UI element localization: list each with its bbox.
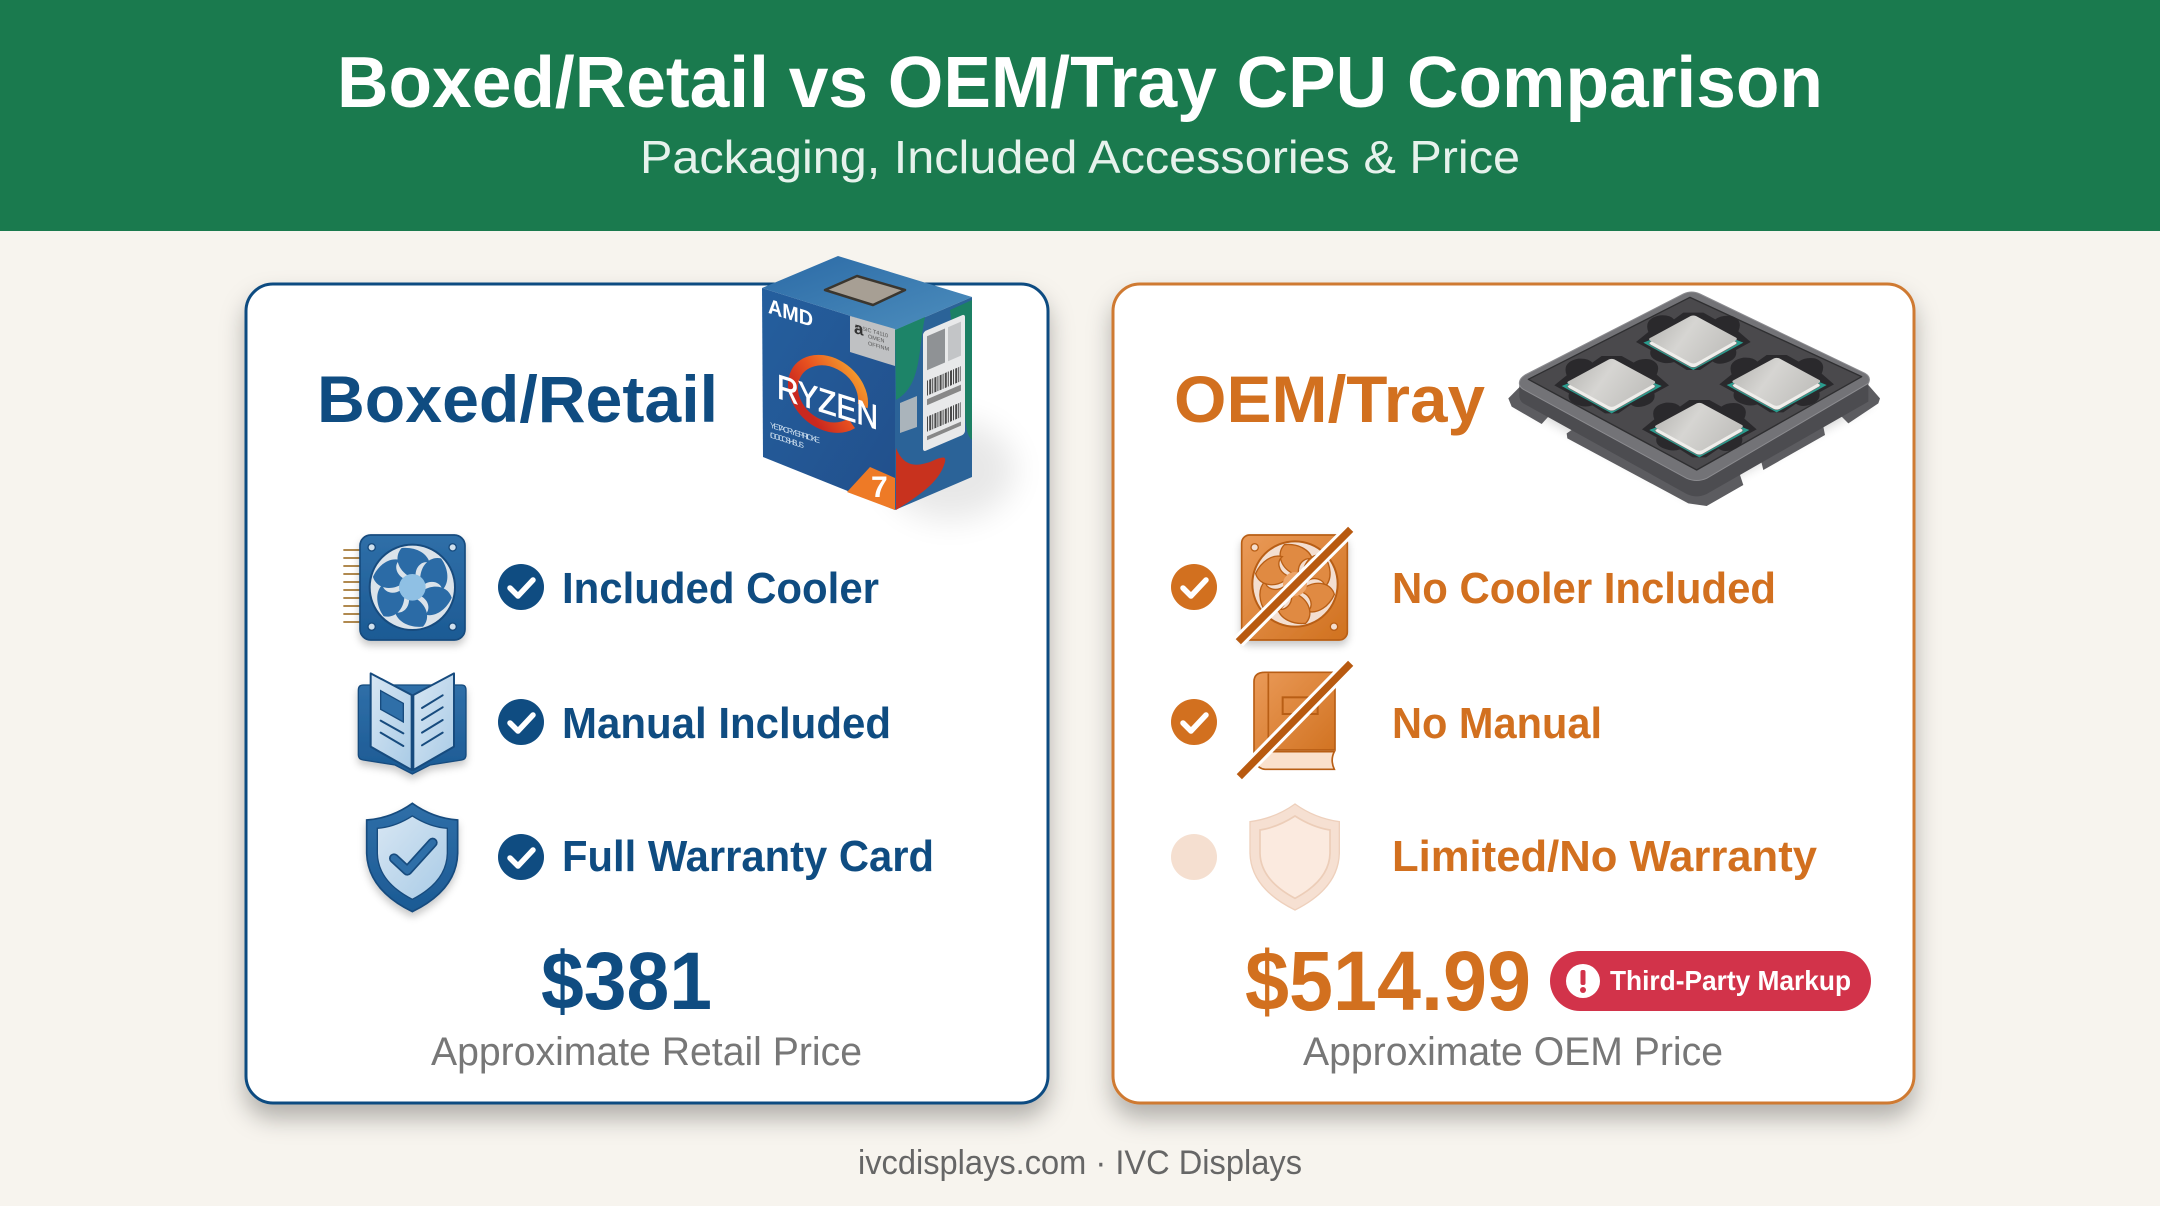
footer credit: ivcdisplays.com · IVC Displays <box>858 1144 1302 1182</box>
silver label on box: OMEN <box>868 334 885 345</box>
silver label on box: OFFINM <box>868 341 889 353</box>
panel: Boxed/Retail <box>246 256 1048 1103</box>
row: Manual Included <box>358 673 891 774</box>
muted status dot <box>1171 834 1217 880</box>
icon: faded shield <box>1250 804 1339 910</box>
header banner <box>0 0 2160 231</box>
silver label on box <box>850 316 895 366</box>
badge: Third-Party Markup <box>1550 951 1871 1011</box>
check badge <box>498 564 544 610</box>
icon: cooling fan <box>343 535 465 640</box>
label: Manual Included <box>562 699 891 748</box>
box brand text: IOOCO SHISUS <box>770 431 805 450</box>
row: Included Cooler <box>343 535 879 640</box>
row: No Cooler Included <box>1171 529 1776 642</box>
title: Boxed/Retail vs OEM/Tray CPU Comparison <box>337 43 1823 123</box>
orange 7 badge <box>847 467 895 510</box>
row: No Manual <box>1171 663 1602 777</box>
product image: retail CPU box <box>762 256 1015 520</box>
retail price caption: Approximate Retail Price <box>431 1030 862 1074</box>
box brand text: AMD <box>768 294 813 332</box>
box brand text: YETA CRY EPIFI IOKE <box>770 421 821 445</box>
label: Limited/No Warranty <box>1392 832 1818 881</box>
panel: OEM/Tray <box>1113 284 1914 1103</box>
icon: open manual <box>358 673 466 774</box>
box brand text: RYZEN <box>777 367 878 437</box>
check badge <box>1171 699 1217 745</box>
heading: OEM/Tray: OEM/Tray <box>1174 362 1485 436</box>
heading: Boxed/Retail: Boxed/Retail <box>317 362 718 436</box>
subtitle: Packaging, Included Accessories & Price <box>640 131 1520 183</box>
check badge <box>1171 564 1217 610</box>
orange 7 badge: 7 <box>871 471 888 504</box>
row: Full Warranty Card <box>367 803 934 912</box>
label: No Cooler Included <box>1392 564 1776 613</box>
silver label on box: BASIC T4110 <box>855 324 888 340</box>
badge: Third-Party Markup: Third-Party Markup <box>1610 965 1851 996</box>
check badge <box>498 699 544 745</box>
icon: crossed-out manual <box>1239 663 1351 777</box>
check badge <box>498 834 544 880</box>
icon: crossed-out fan <box>1238 529 1351 642</box>
retail price: $381 <box>541 936 712 1027</box>
silver label on box: a <box>854 317 864 340</box>
label: Full Warranty Card <box>562 832 934 881</box>
box brand text <box>768 294 878 474</box>
OEM price: $514.99 <box>1245 934 1531 1028</box>
product image: CPU tray <box>1508 292 1880 506</box>
row: Limited/No Warranty <box>1171 804 1818 910</box>
label: No Manual <box>1392 699 1602 748</box>
barcode sticker <box>923 314 965 452</box>
label: Included Cooler <box>562 564 879 613</box>
icon: warranty shield <box>367 803 458 912</box>
OEM price caption: Approximate OEM Price <box>1303 1030 1723 1074</box>
